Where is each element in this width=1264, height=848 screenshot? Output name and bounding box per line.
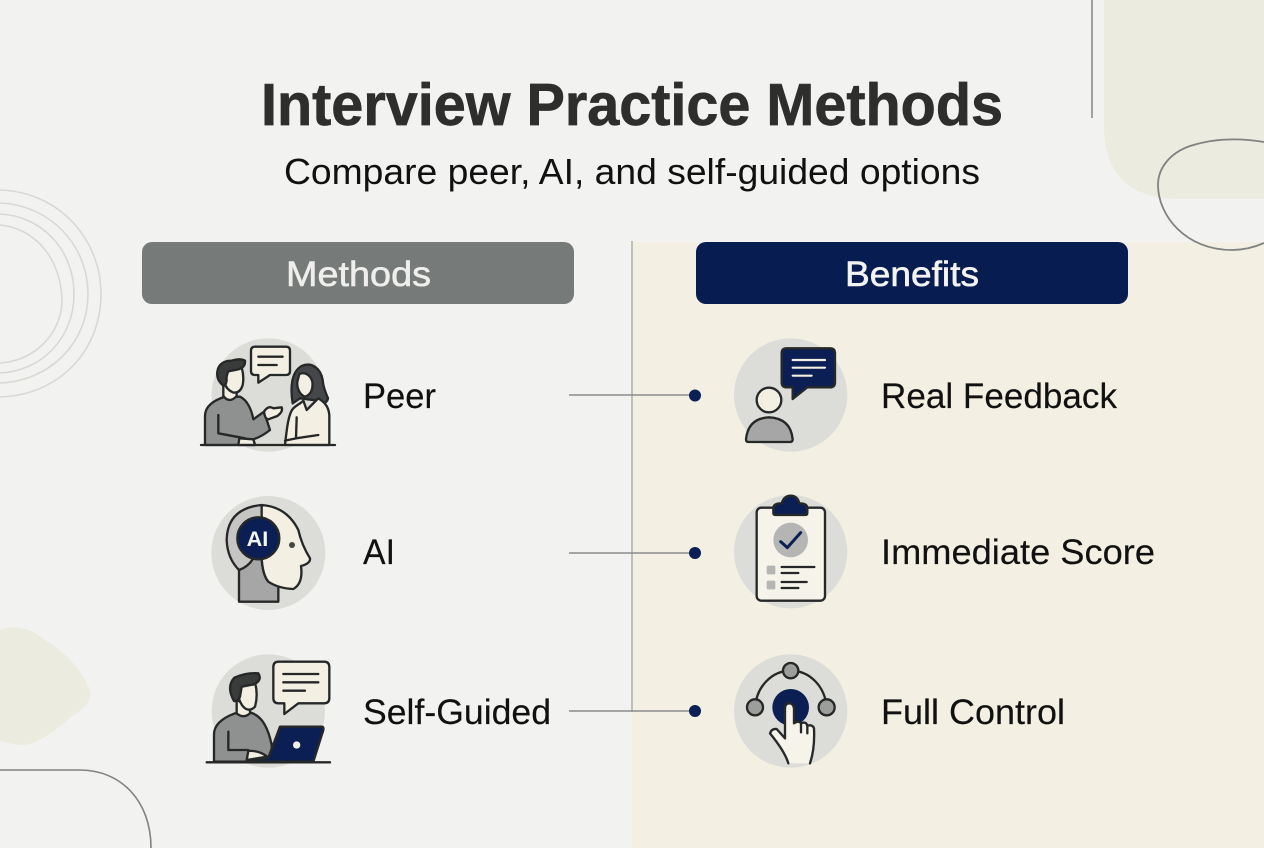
icon: self-guided learner at laptop xyxy=(207,654,330,768)
header: benefits xyxy=(696,242,1128,304)
header: benefits: Benefits xyxy=(845,255,979,294)
decorative outline blob: top right xyxy=(1158,139,1264,250)
title: Interview Practice Methods xyxy=(261,72,1003,138)
icon: peer conversation xyxy=(201,338,335,452)
decorative concentric rings: left xyxy=(0,190,101,397)
icon: full control hand and nodes xyxy=(734,654,847,768)
header: methods xyxy=(142,242,574,304)
label: AI: AI xyxy=(363,533,395,572)
label: immediate score: Immediate Score xyxy=(881,533,1155,572)
decorative rounded line: bottom left xyxy=(0,770,151,848)
decorative shape: top right xyxy=(1104,0,1264,199)
icon: real feedback xyxy=(734,338,847,452)
panel: benefits background xyxy=(632,242,1264,848)
icon: immediate score clipboard xyxy=(734,495,847,608)
subtitle: Compare peer, AI, and self-guided options xyxy=(284,151,980,192)
label: full control: Full Control xyxy=(881,693,1065,732)
icon: AI head xyxy=(211,496,325,610)
decorative vertical line: top right xyxy=(1091,0,1093,118)
icon: AI head: AI xyxy=(247,527,268,551)
connector: self-guided to full control xyxy=(569,705,701,717)
central divider xyxy=(631,241,633,712)
header: methods: Methods xyxy=(286,255,431,294)
connector: peer to real feedback xyxy=(569,390,701,402)
label: peer: Peer xyxy=(363,377,436,416)
decorative blob: lower left xyxy=(0,627,91,745)
label: real feedback: Real Feedback xyxy=(881,377,1117,416)
label: self-guided: Self-Guided xyxy=(363,693,551,732)
connector: AI to immediate score xyxy=(569,547,701,559)
